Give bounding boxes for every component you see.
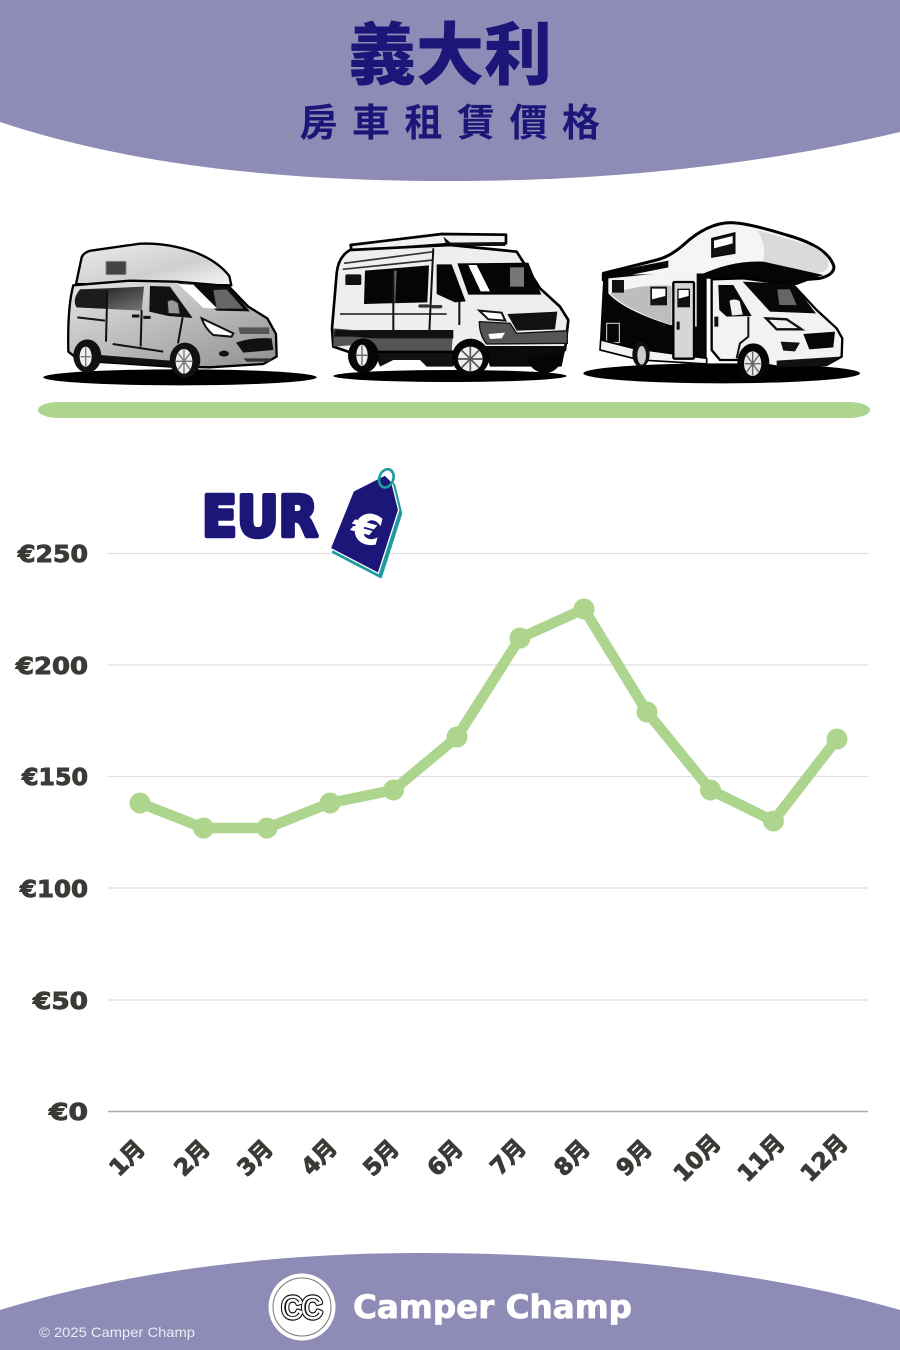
side windows bbox=[75, 287, 144, 311]
y axis labels: €150 bbox=[21, 765, 88, 791]
brand name: Camper Champ bbox=[353, 1288, 632, 1326]
tag loop bbox=[377, 467, 396, 489]
data points bbox=[130, 598, 848, 838]
windscreen bbox=[457, 263, 541, 295]
door lines bbox=[77, 290, 183, 352]
vehicle: white panel campervan bbox=[332, 234, 568, 382]
month labels: 2月 bbox=[170, 1136, 216, 1182]
body bbox=[68, 281, 277, 367]
y axis labels: €200 bbox=[15, 654, 88, 680]
month labels: 10月 bbox=[669, 1130, 726, 1187]
shadow bbox=[43, 369, 317, 385]
front grille bbox=[236, 338, 273, 353]
title: 義大利 bbox=[348, 0, 552, 99]
tag backing bbox=[333, 478, 401, 577]
cab bbox=[712, 278, 842, 367]
shadow bbox=[333, 370, 567, 382]
y axis labels bbox=[15, 542, 88, 1126]
body bbox=[332, 245, 568, 357]
shadow bbox=[583, 363, 860, 383]
logo: CC bbox=[282, 1290, 322, 1325]
euro symbol: € bbox=[346, 503, 387, 556]
tag body bbox=[330, 475, 399, 573]
y axis labels: €100 bbox=[19, 877, 88, 903]
month labels: 8月 bbox=[550, 1136, 596, 1182]
wing mirror bbox=[167, 300, 180, 314]
month labels: 7月 bbox=[486, 1135, 532, 1181]
undercarriage bbox=[373, 350, 457, 367]
header banner bbox=[0, 0, 900, 181]
bumper bbox=[479, 322, 567, 344]
roof window bbox=[106, 261, 126, 275]
month labels: 9月 bbox=[612, 1136, 658, 1182]
footer banner bbox=[0, 1253, 900, 1350]
far wheel bbox=[527, 353, 563, 373]
over-cab alcove bbox=[603, 223, 834, 282]
green divider bar bbox=[38, 402, 870, 418]
skirt bbox=[600, 340, 707, 364]
month labels: 11月 bbox=[733, 1130, 790, 1187]
cab door line bbox=[737, 317, 748, 358]
front wheel bbox=[452, 339, 489, 376]
month labels: 1月 bbox=[105, 1136, 151, 1182]
headlight bbox=[202, 318, 233, 337]
month labels: 3月 bbox=[233, 1136, 279, 1182]
front wheel bbox=[737, 343, 769, 382]
headlights bbox=[766, 318, 802, 329]
vehicle: silver high-top van bbox=[43, 244, 317, 385]
cab side window bbox=[718, 285, 752, 317]
rear wheel bbox=[348, 338, 379, 373]
copyright: © 2025 Camper Champ bbox=[39, 1324, 195, 1340]
grid lines bbox=[108, 554, 868, 1000]
door handles bbox=[132, 316, 151, 317]
front wheel bbox=[170, 343, 200, 377]
side stripes bbox=[340, 252, 447, 314]
sill bbox=[98, 355, 173, 367]
month labels: 4月 bbox=[297, 1135, 343, 1181]
month labels bbox=[105, 1130, 853, 1187]
pop-up roof bbox=[76, 244, 231, 285]
y axis labels: €50 bbox=[32, 989, 88, 1015]
rear body bbox=[600, 273, 707, 363]
entry door bbox=[673, 282, 694, 359]
headlight bbox=[479, 311, 505, 321]
currency label: EUR bbox=[202, 485, 318, 550]
subtitle: 房車租賃價格 bbox=[299, 92, 615, 147]
windscreen bbox=[743, 282, 816, 313]
grille bbox=[507, 312, 557, 331]
door handles bbox=[420, 301, 441, 312]
alcove window bbox=[712, 233, 735, 257]
door lines bbox=[393, 248, 459, 332]
lower dark trim bbox=[333, 328, 453, 351]
line chart bbox=[15, 542, 868, 1187]
month labels: 12月 bbox=[796, 1130, 853, 1187]
price line bbox=[140, 609, 837, 828]
windscreen bbox=[178, 283, 250, 311]
rear wheel bbox=[632, 342, 650, 367]
rear wheel bbox=[73, 339, 101, 373]
y axis labels: €0 bbox=[48, 1100, 88, 1126]
month labels: 5月 bbox=[359, 1136, 405, 1182]
y axis labels: €250 bbox=[17, 542, 88, 568]
roof rack bbox=[351, 234, 506, 251]
rear windows bbox=[612, 280, 624, 293]
logo: CC bbox=[282, 1290, 322, 1325]
logo bbox=[268, 1274, 336, 1340]
vehicle: black and white motorhome bbox=[583, 223, 860, 383]
month labels: 6月 bbox=[423, 1136, 469, 1182]
grille bbox=[803, 332, 835, 349]
side windows bbox=[364, 265, 429, 304]
icon: euro price tag bbox=[330, 467, 401, 577]
